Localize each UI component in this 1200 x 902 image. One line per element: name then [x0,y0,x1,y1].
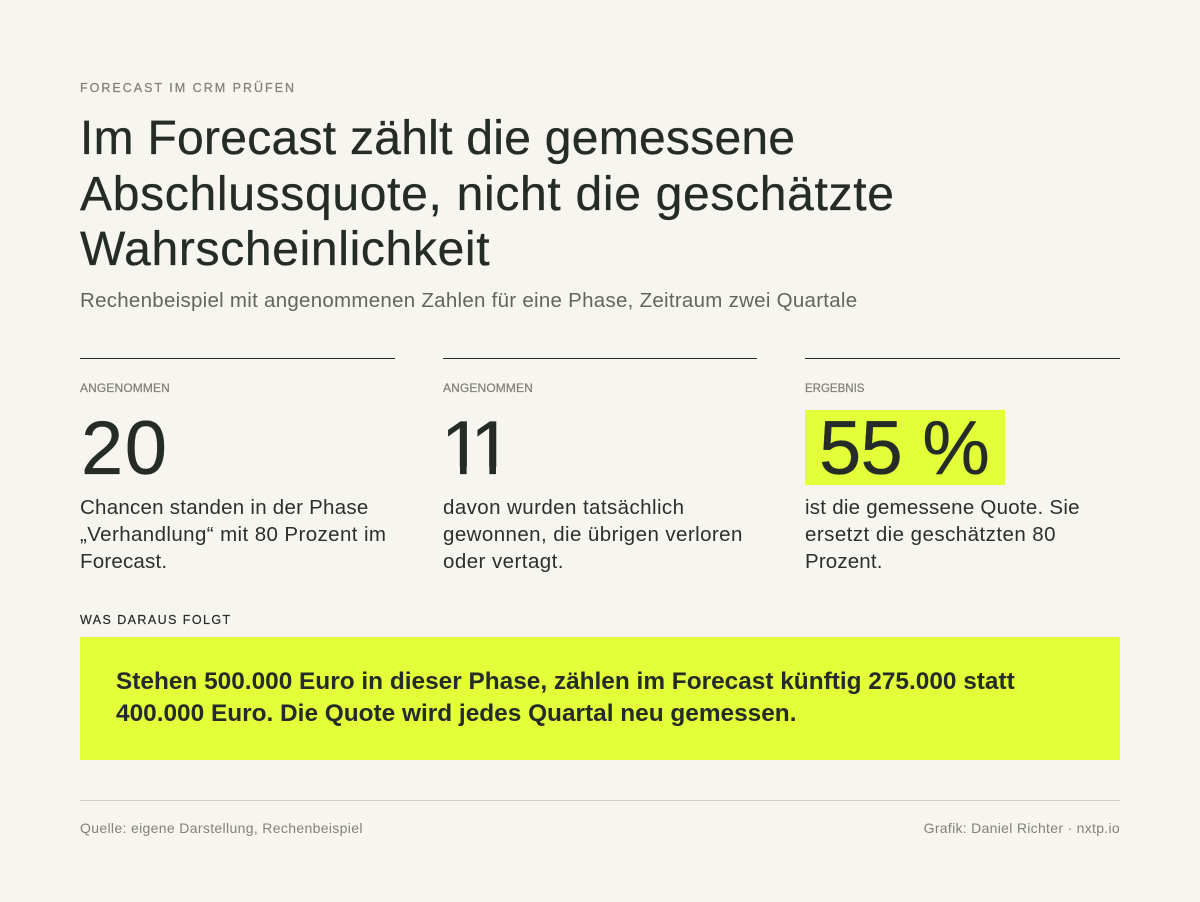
text: chances: Chancen standen in der Phase [80,496,369,519]
number: 11 [448,421,496,474]
text: chances: Forecast. [80,550,167,573]
text: chances: „Verhandlung“ mit 80 Prozent im [80,523,386,546]
text: chances [80,496,386,573]
callout [80,637,1120,760]
eyebrow: FORECAST IM CRM PRÜFEN [80,81,296,95]
title [80,112,895,276]
text: result: ersetzt die geschätzten 80 [805,523,1056,546]
text: won: oder vertagt. [443,550,564,573]
text: won [443,496,743,573]
title: Abschlussquote, nicht die geschätzte [80,168,895,220]
footer rule [80,800,1120,801]
label: ergebnis: ERGEBNIS [805,383,864,395]
label: angenommen: ANGENOMMEN [443,381,533,395]
number: 11: 1 [441,406,483,491]
text: result: ist die gemessene Quote. Sie [805,496,1080,519]
section heading: WAS DARAUS FOLGT [80,613,232,627]
panel: stat 55 percent [805,358,1120,573]
panel: stat 20 [80,358,395,573]
number: 20: 20 [81,406,169,491]
number: 11: 1 [470,406,512,491]
text: won: gewonnen, die übrigen verloren [443,523,743,546]
panel: stat 11 [442,358,757,573]
title: Im Forecast zählt die gemessene [80,112,795,165]
source: Quelle: eigene Darstellung, Rechenbeispiel [80,820,363,836]
subtitle: Rechenbeispiel mit angenommenen Zahlen für eine Phase, Zeitraum zwei Quartale [80,289,857,312]
text: result [805,496,1080,573]
text: won: davon wurden tatsächlich [443,496,684,519]
callout: Stehen 500.000 Euro in dieser Phase, zählen im Forecast künftig 275.000 statt [116,668,1015,695]
label: angenommen: ANGENOMMEN [80,381,170,395]
callout: 400.000 Euro. Die Quote wird jedes Quartal neu gemessen. [116,700,796,727]
number: 55 percent highlighted: 55 % [819,406,989,491]
credit: Grafik: Daniel Richter · nxtp.io [924,820,1120,836]
title: Wahrscheinlichkeit [80,223,490,276]
text: result: Prozent. [805,550,883,573]
